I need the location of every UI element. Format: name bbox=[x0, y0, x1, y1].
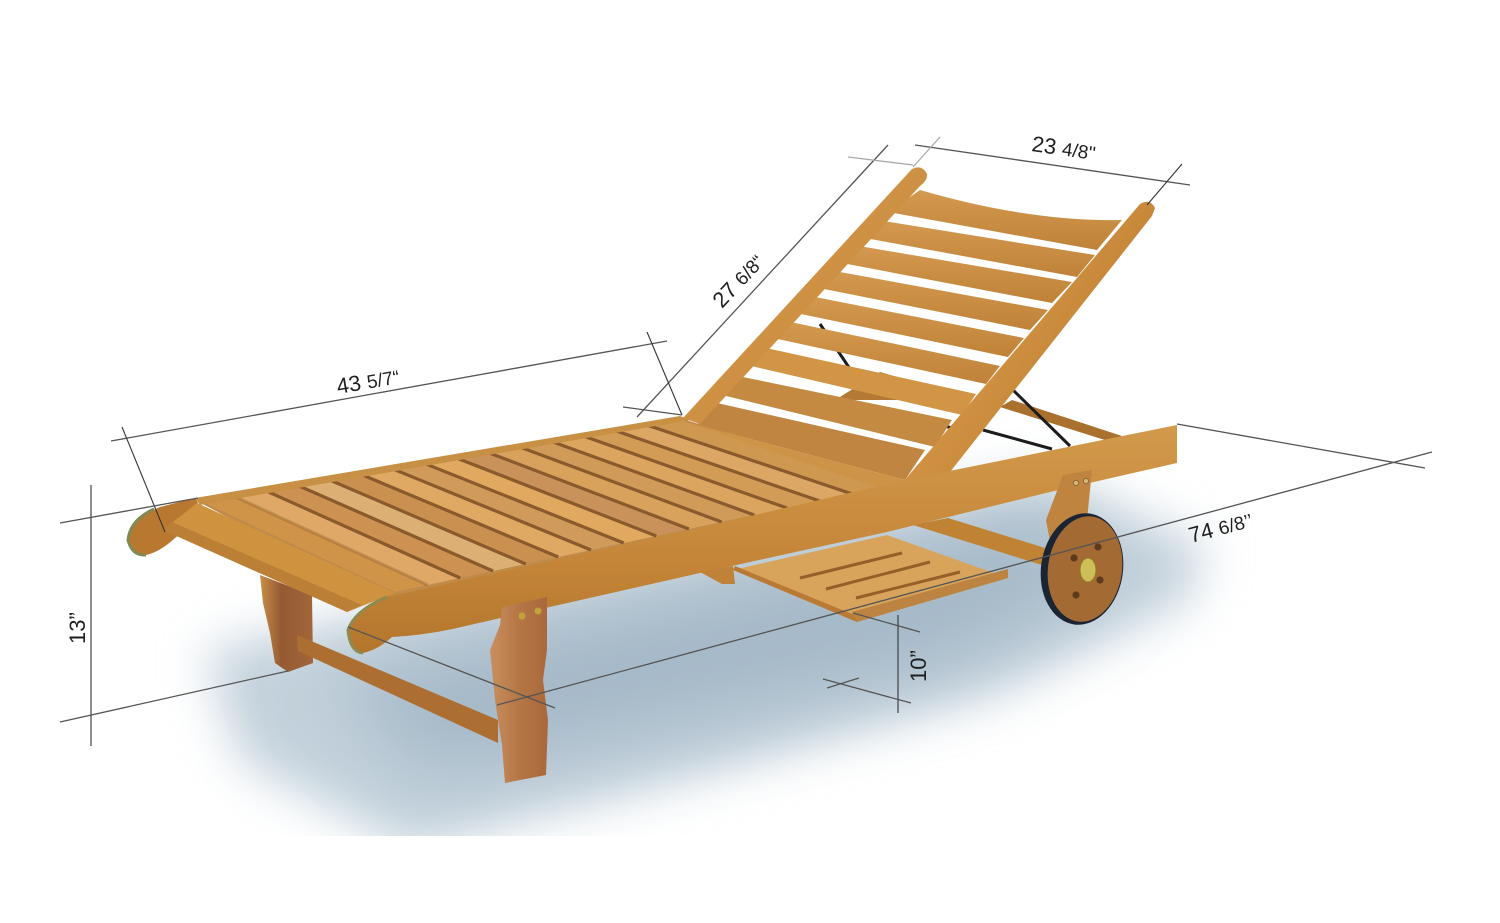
dimension: overall length bbox=[348, 424, 1432, 708]
wheel bbox=[1034, 508, 1130, 630]
backrest left rail bbox=[683, 167, 927, 424]
dimension: seat length bbox=[111, 332, 682, 532]
foot curl far side bbox=[128, 498, 205, 555]
dimension: backrest length bbox=[637, 145, 913, 417]
foot rail lower shade bbox=[163, 522, 362, 612]
backrest right rail bbox=[903, 202, 1155, 482]
wheel bracket screws bbox=[1073, 478, 1089, 486]
front leg bbox=[490, 597, 548, 783]
label 23 4/8: 23 4/8'' bbox=[1030, 131, 1097, 165]
lower crossbar bbox=[297, 635, 498, 743]
dimension: backrest width bbox=[913, 131, 1190, 205]
floor shadow bbox=[205, 480, 1205, 850]
rail end edge bbox=[348, 597, 387, 653]
label 13: 13” bbox=[65, 612, 90, 644]
deck base bbox=[195, 418, 905, 605]
label 43 5/7: 43 5/7“ bbox=[335, 363, 401, 399]
label 27 6/8: 27 6/8“ bbox=[707, 249, 769, 312]
black support rods bbox=[820, 324, 1070, 449]
lower backrest slats meeting deck bbox=[680, 420, 905, 488]
near side rail bbox=[348, 425, 1177, 653]
lounger bbox=[128, 167, 1177, 783]
label 74 6/8: 74 6/8’’ bbox=[1186, 507, 1255, 548]
slide-out tray bbox=[700, 535, 1008, 622]
brass screws bbox=[518, 612, 526, 620]
tray bracket bbox=[700, 566, 735, 584]
backrest slats bbox=[697, 190, 1122, 480]
foot curl edge bbox=[128, 509, 154, 555]
label 10: 10” bbox=[906, 650, 931, 682]
far deck rail bbox=[195, 416, 690, 505]
dimension: height 13 bbox=[60, 485, 288, 746]
foot end rail bbox=[163, 503, 395, 612]
rear left leg bbox=[260, 575, 313, 672]
backrest support brace bbox=[835, 372, 925, 400]
dimension: tray height 10 bbox=[823, 613, 931, 713]
seat slats bbox=[205, 420, 885, 592]
far side rail behind backrest bbox=[1000, 400, 1122, 441]
wheel leg bbox=[1046, 470, 1092, 552]
rear crossbar under deck bbox=[913, 518, 1045, 565]
